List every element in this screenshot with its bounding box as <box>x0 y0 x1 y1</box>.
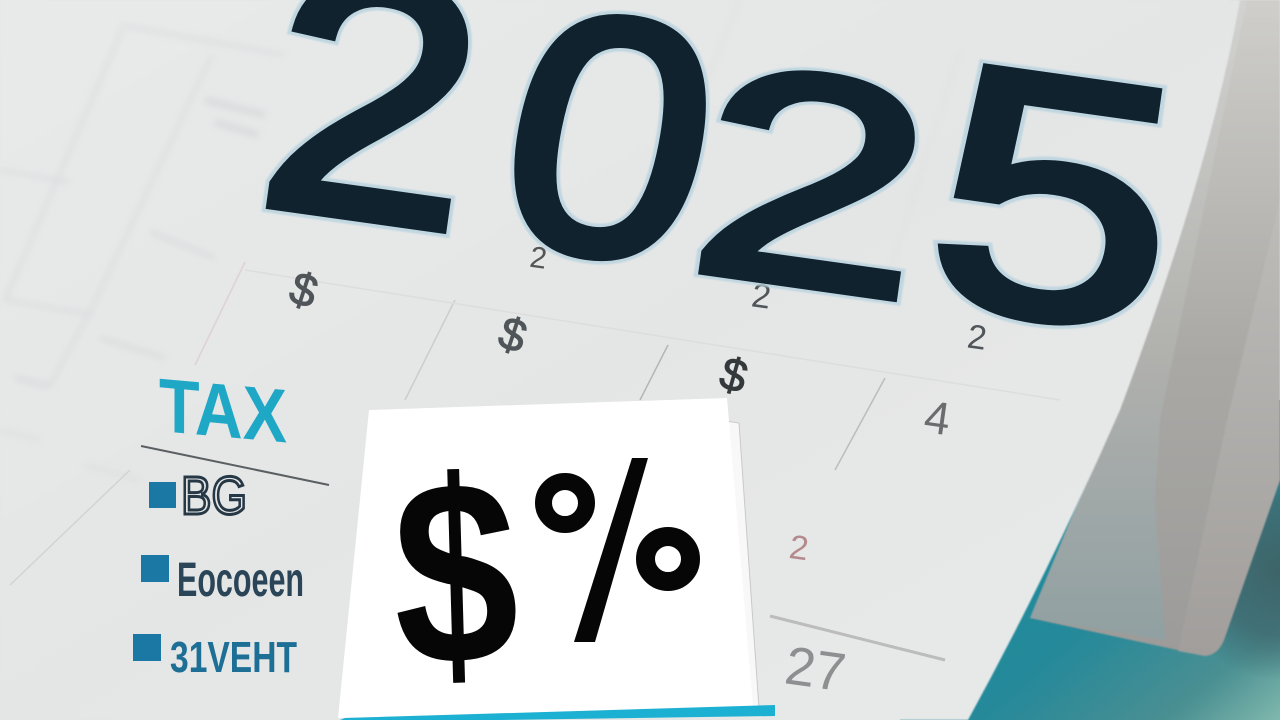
legend item 3 <box>133 633 297 682</box>
digit halo <box>243 0 1201 405</box>
legend item 2: Eocoeen <box>177 553 304 607</box>
card back sheet <box>726 421 759 710</box>
day number 2 right: 2 <box>965 317 989 358</box>
card cyan bottom strip <box>340 705 775 720</box>
white card with dollar and percent <box>338 398 775 720</box>
TAX heading: TAX <box>159 363 287 460</box>
digit halo: 2 <box>675 0 950 363</box>
dollar mark 2: $ <box>493 306 533 363</box>
percent bottom circle <box>646 536 690 582</box>
day number 4: 4 <box>921 390 954 445</box>
card face <box>338 398 753 718</box>
calendar grid lines <box>10 262 1060 660</box>
small calendar marks <box>284 241 989 703</box>
faint blurred background grid <box>0 0 960 480</box>
dollar symbol: $ <box>389 425 522 720</box>
tax legend <box>133 363 329 682</box>
legend item 3: 31VEHT <box>170 633 297 682</box>
day number 27: 27 <box>781 636 849 703</box>
dollar mark 1: $ <box>284 261 324 318</box>
legend item 1 <box>149 466 247 526</box>
teal desk background <box>900 400 1280 720</box>
percent slash <box>574 458 648 642</box>
day number 2 red: 2 <box>787 528 811 568</box>
legend divider <box>141 446 329 485</box>
day number 2 under zero: 2 <box>528 241 549 276</box>
legend item 2 <box>141 553 304 607</box>
legend item 1: BG <box>181 466 247 526</box>
day number 2: 2 <box>749 276 773 317</box>
digit 2 second: 2 <box>675 0 950 363</box>
percent top circle <box>544 482 586 524</box>
digit halo: 5 <box>910 0 1201 405</box>
year heading 2025 <box>243 0 1201 405</box>
dollar mark 3: $ <box>714 346 753 403</box>
digit 5: 5 <box>910 0 1201 405</box>
calendar page stack <box>1030 0 1280 656</box>
